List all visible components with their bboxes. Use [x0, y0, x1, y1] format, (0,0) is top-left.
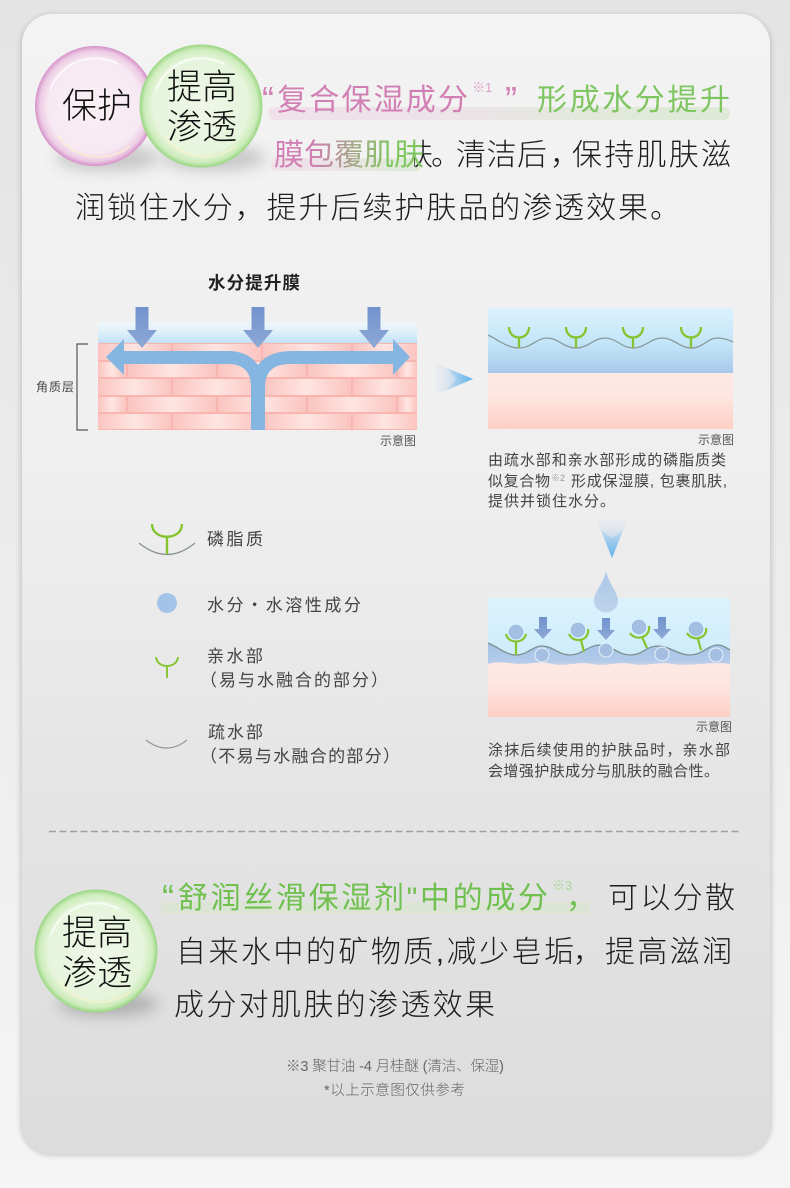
heading: intro paragraph: 润锁住水分，提升后续护肤品的渗透效果。 — [75, 192, 680, 225]
text: application description: 涂抹后续使用的护肤品时，亲水部 — [488, 742, 730, 759]
text: film description: ※2 — [551, 473, 565, 483]
icon: protect bubble: 保护 — [62, 87, 132, 126]
arrow: branching water flow — [106, 339, 410, 430]
heading: intro paragraph: 复合保湿成分 — [277, 84, 468, 117]
heading: intro paragraph: ， — [550, 139, 580, 172]
heading: intro paragraph: ※1 — [472, 80, 492, 95]
text: film description: 似复合物 — [488, 472, 550, 490]
legend item: phospholipid: 磷脂质 — [207, 530, 263, 549]
footnotes: *以上示意图仅供参考 — [324, 1082, 465, 1099]
text: lower paragraph: 舒润丝滑保湿剂"中的成分 — [178, 882, 548, 915]
text: film description: 提供并锁住水分。 — [488, 493, 615, 510]
heading: intro paragraph: 保持肌肤滋 — [572, 139, 731, 172]
footnotes: ※3 聚甘油 -4 月桂醚 (清洁、保湿) — [286, 1058, 504, 1075]
icon: penetrate bubble lower: 渗透 — [62, 954, 132, 993]
text: lower paragraph: ， — [566, 882, 596, 915]
bracket — [77, 344, 88, 430]
text: film description — [488, 452, 727, 510]
heading: intro paragraph: ” — [505, 79, 517, 120]
legend item: water: 水分・水溶性成分 — [207, 596, 361, 615]
arrow: right chevron — [435, 363, 473, 395]
text: lower paragraph: 提高滋润 — [605, 936, 732, 969]
heading: intro paragraph: 清洁后 — [456, 139, 547, 172]
caption: 示意图 — [380, 433, 416, 448]
text: lower paragraph: ， — [573, 936, 603, 969]
heading: intro paragraph: 肤 — [403, 139, 433, 172]
footnotes — [286, 1058, 504, 1099]
heading: intro paragraph: 膜包覆肌肤 — [274, 139, 424, 172]
chart: film panel — [488, 308, 734, 510]
heading: intro paragraph: 。 — [431, 139, 461, 172]
heading: intro paragraph — [75, 79, 731, 225]
icon: penetrate bubble — [140, 44, 266, 171]
text: lower paragraph: 自来水中的矿物质,减少皂垢 — [176, 936, 574, 969]
icon: water drop — [594, 572, 618, 612]
caption: 示意图 — [696, 719, 732, 734]
text: lower paragraph — [161, 877, 735, 1022]
legend item: hydrophilic — [156, 647, 388, 690]
chart: stratum corneum diagram — [36, 307, 417, 448]
legend item: water — [157, 593, 361, 615]
heading: intro paragraph: 形成水分提升 — [537, 84, 730, 117]
icon: penetrate bubble: 渗透 — [167, 108, 237, 147]
text: application description — [488, 742, 730, 780]
text: application description: 会增强护肤成分与肌肤的融合性。 — [488, 763, 719, 780]
legend item: hydrophilic: （易与水融合的部分） — [200, 671, 388, 690]
heading: intro paragraph: “ — [262, 79, 274, 120]
icon: penetrate bubble lower: 提高 — [62, 914, 132, 953]
label: stratum corneum: 角质层 — [36, 380, 74, 394]
icon: penetrate bubble lower — [34, 890, 158, 1016]
caption: 示意图 — [698, 432, 734, 447]
legend item: hydrophilic: 亲水部 — [207, 647, 263, 666]
legend item: hydrophobic: （不易与水融合的部分） — [200, 747, 400, 766]
heading: moisture film: 水分提升膜 — [208, 273, 300, 293]
text: lower paragraph: 可以分散 — [608, 882, 735, 915]
arrows: downward penetration — [127, 307, 389, 348]
legend item: phospholipid — [139, 524, 263, 554]
legend item: hydrophobic: 疏水部 — [208, 723, 263, 742]
chart: application panel — [488, 572, 732, 780]
text: lower paragraph: 成分对肌肤的渗透效果 — [174, 989, 495, 1022]
text: film description: 形成保湿膜, 包裹肌肤, — [571, 473, 727, 490]
icon: protect bubble — [35, 46, 160, 171]
legend — [139, 524, 400, 766]
text: film description: 由疏水部和亲水部形成的磷脂质类 — [488, 452, 726, 469]
icon: penetrate bubble: 提高 — [167, 68, 237, 107]
text: lower paragraph: “ — [162, 877, 174, 918]
legend item: hydrophobic — [146, 723, 400, 766]
arrow: down chevron — [596, 519, 628, 558]
text: lower paragraph: ※3 — [552, 878, 572, 893]
